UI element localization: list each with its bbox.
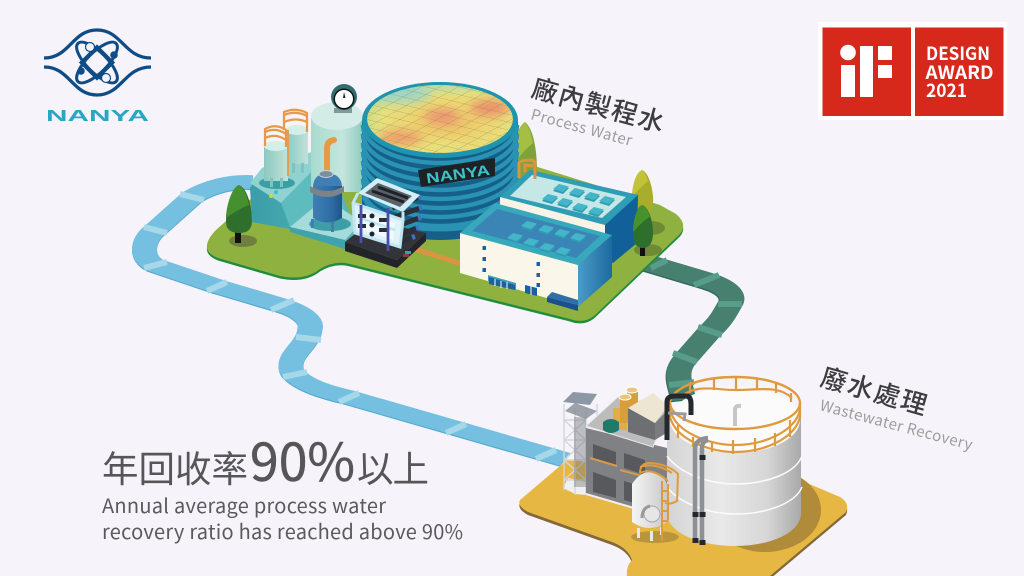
logo: iF design award: AWARD <box>924 59 994 85</box>
grey pipes <box>695 438 708 543</box>
pipe bands <box>144 194 556 459</box>
tree: green right <box>633 205 662 256</box>
blue water pipe <box>144 182 565 460</box>
stat heading: 以上 <box>357 440 429 493</box>
green factory platform <box>207 150 683 323</box>
tree: olive behind tank <box>513 122 537 182</box>
label: process water: 廠內製程水 <box>528 68 669 140</box>
label: wastewater recovery <box>817 357 975 455</box>
blue block <box>547 292 578 311</box>
logo: Nanya: NANYA <box>46 108 150 125</box>
yellow wastewater platform <box>519 460 847 576</box>
blue reactor vessel <box>309 170 351 232</box>
tank sign: NANYA <box>425 163 492 187</box>
vent pipe <box>735 406 741 426</box>
doors <box>488 275 537 296</box>
stat heading: 90% <box>250 421 355 496</box>
roof tiles: upper <box>542 184 615 217</box>
frame top <box>358 178 420 212</box>
logo: iF design award: 2021 <box>926 77 967 103</box>
stat heading: 年回收率 <box>102 440 248 493</box>
roof tiles: lower <box>507 221 586 257</box>
stat description: recovery ratio has reached above 90% <box>102 516 463 545</box>
small tank: front <box>259 126 295 189</box>
orange pipe to reactor <box>327 140 334 172</box>
small tank: rear <box>284 110 308 173</box>
frame front <box>353 203 403 247</box>
orange handle <box>519 160 535 179</box>
label: wastewater recovery: 廢水處理 <box>817 357 932 423</box>
windows <box>482 246 540 287</box>
stat description: Annual average process water <box>102 490 386 519</box>
tree: olive right <box>632 170 665 235</box>
lower factory building <box>460 203 612 311</box>
side tubes <box>392 196 422 246</box>
upper factory building <box>500 160 638 263</box>
tree: left <box>226 185 257 247</box>
label: process water: Process Water <box>529 104 635 151</box>
icon: gauge <box>331 84 357 110</box>
logo: iF design award: DESIGN <box>926 40 990 66</box>
rooftop tanks <box>603 387 638 433</box>
concrete base: left <box>250 152 395 249</box>
white vessel with ladder <box>631 463 679 543</box>
grey treatment building <box>586 387 668 510</box>
label: wastewater recovery: Wastewater Recovery <box>818 395 975 455</box>
scaffold tower <box>563 392 597 495</box>
green wastewater pipe <box>644 260 742 401</box>
orange pipe to building <box>415 249 462 264</box>
stat description <box>102 490 463 545</box>
tall pale tank with gauge <box>311 84 363 192</box>
rooftop box <box>628 393 668 440</box>
tank sign <box>418 158 495 187</box>
black inlet pipe <box>667 396 691 440</box>
stat heading <box>102 421 429 496</box>
main tank with wafer top <box>362 78 518 240</box>
membrane filtration unit <box>345 178 426 268</box>
wastewater tank <box>667 376 802 546</box>
logo: Nanya <box>44 30 151 125</box>
tank railing <box>670 376 800 454</box>
logo: iF design award <box>818 22 1007 120</box>
